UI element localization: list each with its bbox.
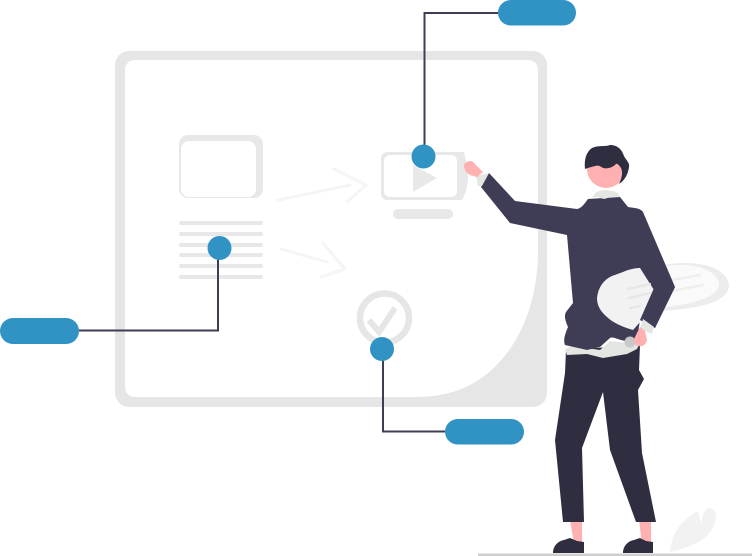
cuffs: [476, 173, 654, 334]
panel: presentation board: [115, 51, 547, 407]
icon: leaf plant: [670, 508, 716, 552]
speech bubble paper: back: [660, 263, 729, 311]
sweater: [481, 173, 675, 350]
icon: video player: [381, 152, 468, 219]
shirt hem: [565, 341, 640, 358]
thumb tab: [624, 336, 636, 348]
shoes: [553, 538, 653, 553]
label pill: bottom: [445, 419, 524, 444]
icon: check mark: [360, 294, 409, 342]
label pill: left: [0, 318, 79, 344]
icon: text lines: [179, 221, 263, 279]
label pill: top: [498, 0, 576, 26]
right hand on hip: [634, 327, 647, 346]
face: [587, 150, 625, 188]
collar: [592, 190, 620, 199]
trousers: [555, 345, 656, 522]
arrow: image to video: [278, 169, 366, 202]
connector: bottom: [383, 352, 445, 432]
marker: text: [208, 236, 232, 260]
left hand pointing: [464, 161, 483, 177]
arrow: text to check: [281, 243, 345, 277]
paper held under arm: [597, 268, 654, 330]
ankles: [570, 520, 651, 544]
icon: image placeholder: [179, 135, 263, 198]
person: [464, 145, 675, 553]
hair: [585, 145, 629, 184]
connector: top: [424, 13, 498, 152]
forearm over paper: [640, 287, 675, 328]
ground line: [478, 554, 752, 556]
marker: video: [412, 144, 436, 168]
marker: check: [370, 337, 394, 361]
connector: left: [79, 250, 218, 330]
